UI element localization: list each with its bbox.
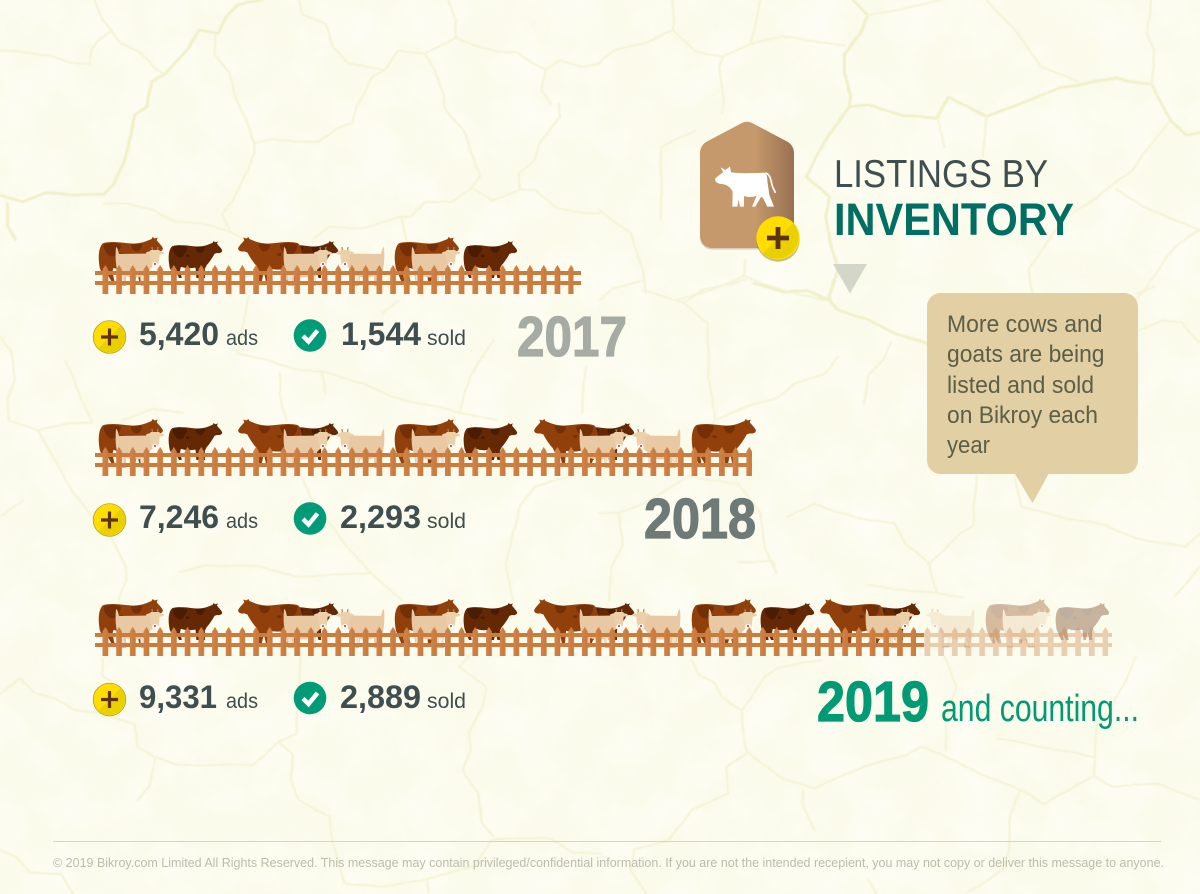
icon: house tag with cow and plus badge [700,122,800,262]
title: INVENTORY [834,194,1074,245]
stats: 2017: 5,420 [139,316,219,352]
year label: 2019 and counting [817,670,1139,734]
stats: 2017: sold [427,327,466,350]
row: 2019 livestock and fence [95,599,1112,656]
stats: 2018: sold [427,510,466,533]
year label: 2019 and counting: 2019 [817,670,929,734]
stats: 2018 [93,499,466,536]
stats: 2017: 1,544 [341,316,421,352]
stats: 2019: sold [427,690,466,713]
stats: 2018: ads [226,510,258,533]
stats: 2019 [93,679,466,716]
row: 2018 livestock and fence [95,419,756,476]
callout: more cows and goats [927,293,1138,503]
stats: 2018: 7,246 [139,499,219,535]
stats: 2018: 2,293 [340,499,421,535]
callout: more cows and goats: year [947,432,990,459]
stats: 2017: ads [226,327,258,350]
stats: 2019: 2,889 [340,679,421,715]
year label: 2019 and counting: and counting... [941,688,1139,730]
arrow: down triangle [833,264,867,294]
callout: more cows and goats: More cows and [947,311,1102,338]
row: 2017 livestock and fence [95,237,581,294]
stats: 2017 [93,316,466,353]
footer: copyright notice: © 2019 Bikroy.com Limited All Rights Reserved. This message may contain privileged/confidential information. If you are not the intended recepient, you may not copy or deliver this message to anyone. [53,855,1164,870]
year label: 2018: 2018 [644,487,756,551]
callout: more cows and goats: goats are being [947,341,1104,368]
title: LISTINGS BY [834,153,1048,196]
title [834,153,1074,245]
callout: more cows and goats: listed and sold [947,372,1094,399]
stats: 2019: ads [226,690,258,713]
callout: more cows and goats: on Bikroy each [947,402,1098,429]
year label: 2017: 2017 [517,305,627,369]
stats: 2019: 9,331 [139,679,217,715]
